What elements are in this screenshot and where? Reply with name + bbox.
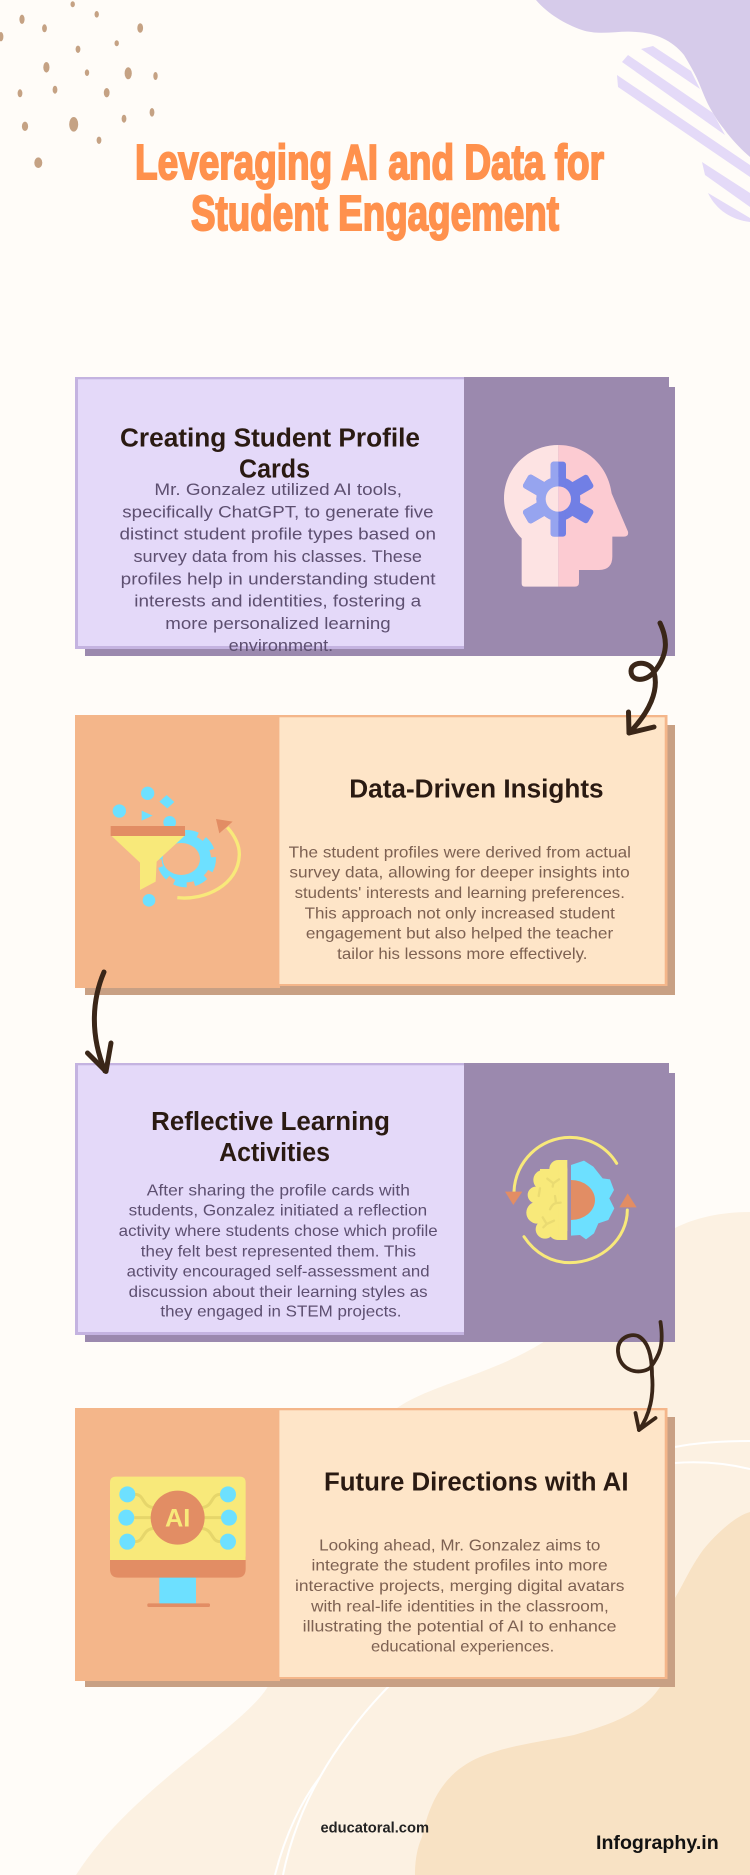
body text: creating student profile cards: survey data from his classes. These [134, 548, 422, 566]
background blob: darker peach corner [415, 1512, 750, 1875]
panel: reflective learning activities [75, 1063, 675, 1342]
body text: data-driven insights: students' interests and learning preferences. [295, 885, 625, 902]
body text: creating student profile cards [120, 481, 436, 655]
body text: future directions with ai: educational experiences. [371, 1639, 554, 1656]
body text: creating student profile cards: interests and identities, fostering a [134, 593, 422, 611]
body text: future directions with ai: with real-life identities in the classroom, [310, 1598, 609, 1615]
body text: data-driven insights [289, 844, 631, 963]
body text: reflective learning activities: activity encouraged self-assessment and [127, 1264, 430, 1281]
footer: educatoral.com: educatoral.com [320, 1820, 429, 1836]
body text: future directions with ai: illustrating the potential of AI to enhance [303, 1619, 617, 1636]
heading: creating student profile cards [120, 425, 420, 483]
icon: funnel and gear [111, 787, 239, 907]
background blob: pale peach lower [76, 1212, 750, 1875]
body text: data-driven insights: survey data, allowing for deeper insights into [289, 865, 630, 882]
body text: data-driven insights: This approach not only increased student [305, 905, 615, 922]
heading: reflective learning activities [151, 1108, 390, 1167]
title: Leveraging AI and Data for [135, 136, 604, 190]
panel: future directions with ai [75, 1408, 675, 1687]
body text: creating student profile cards: specifically ChatGPT, to generate five [122, 503, 434, 521]
body text: creating student profile cards: profiles help in understanding student [121, 570, 436, 588]
body text: reflective learning activities: they felt best represented them. This [141, 1243, 416, 1260]
heading: future directions with ai: Future Directions with AI [324, 1469, 628, 1497]
title: Student Engagement [191, 187, 559, 241]
heading: reflective learning activities: Reflective Learning [151, 1108, 390, 1136]
background curved white lines [275, 1441, 750, 1875]
heading: data-driven insights: Data-Driven Insights [349, 776, 604, 804]
body text: reflective learning activities: After sharing the profile cards with [147, 1182, 410, 1199]
body text: reflective learning activities: they engaged in STEM projects. [160, 1304, 402, 1321]
panel: data-driven insights [75, 715, 675, 995]
body text: reflective learning activities: activity where students chose which profile [119, 1223, 438, 1240]
body text: creating student profile cards: distinct student profile types based on [120, 526, 436, 544]
body text: future directions with ai [295, 1537, 624, 1656]
body text: future directions with ai: Looking ahead, Mr. Gonzalez aims to [319, 1537, 600, 1554]
body text: future directions with ai: integrate the student profiles into more [312, 1558, 608, 1575]
icon: head with gear [504, 445, 628, 587]
body text: reflective learning activities: students, Gonzalez initiated a reflection [129, 1203, 427, 1220]
decorative dots top left [0, 1, 158, 168]
decorative stripes top right [617, 46, 750, 222]
body text: reflective learning activities: discussion about their learning styles as [129, 1284, 428, 1301]
body text: creating student profile cards: Mr. Gonzalez utilized AI tools, [154, 481, 402, 499]
body text: data-driven insights: tailor his lessons more effectively. [337, 946, 588, 963]
body text: creating student profile cards: environment. [229, 637, 333, 655]
body text: future directions with ai: interactive projects, merging digital avatars [295, 1578, 624, 1595]
body text: data-driven insights: engagement but also helped the teacher [306, 926, 614, 943]
icon: ai monitor: AI [165, 1505, 190, 1533]
decorative purple blob top right [536, 0, 750, 157]
body text: data-driven insights: The student profiles were derived from actual [289, 844, 631, 861]
icon: brain and gear cycle [505, 1137, 637, 1263]
heading: creating student profile cards: Cards [239, 455, 310, 483]
arrow: card 1 to card 2 [628, 623, 665, 733]
icon: ai monitor [110, 1477, 246, 1607]
body text: creating student profile cards: more personalized learning [165, 615, 391, 633]
heading: creating student profile cards: Creating Student Profile [120, 425, 420, 453]
title [135, 136, 604, 241]
panel: creating student profile cards [75, 377, 675, 656]
arrow: card 3 to card 4 [618, 1322, 662, 1430]
body text: reflective learning activities [119, 1182, 438, 1321]
heading: reflective learning activities: Activities [219, 1139, 330, 1167]
footer: infography.in: Infography.in [596, 1833, 719, 1854]
arrow: card 2 to card 3 [88, 972, 111, 1072]
